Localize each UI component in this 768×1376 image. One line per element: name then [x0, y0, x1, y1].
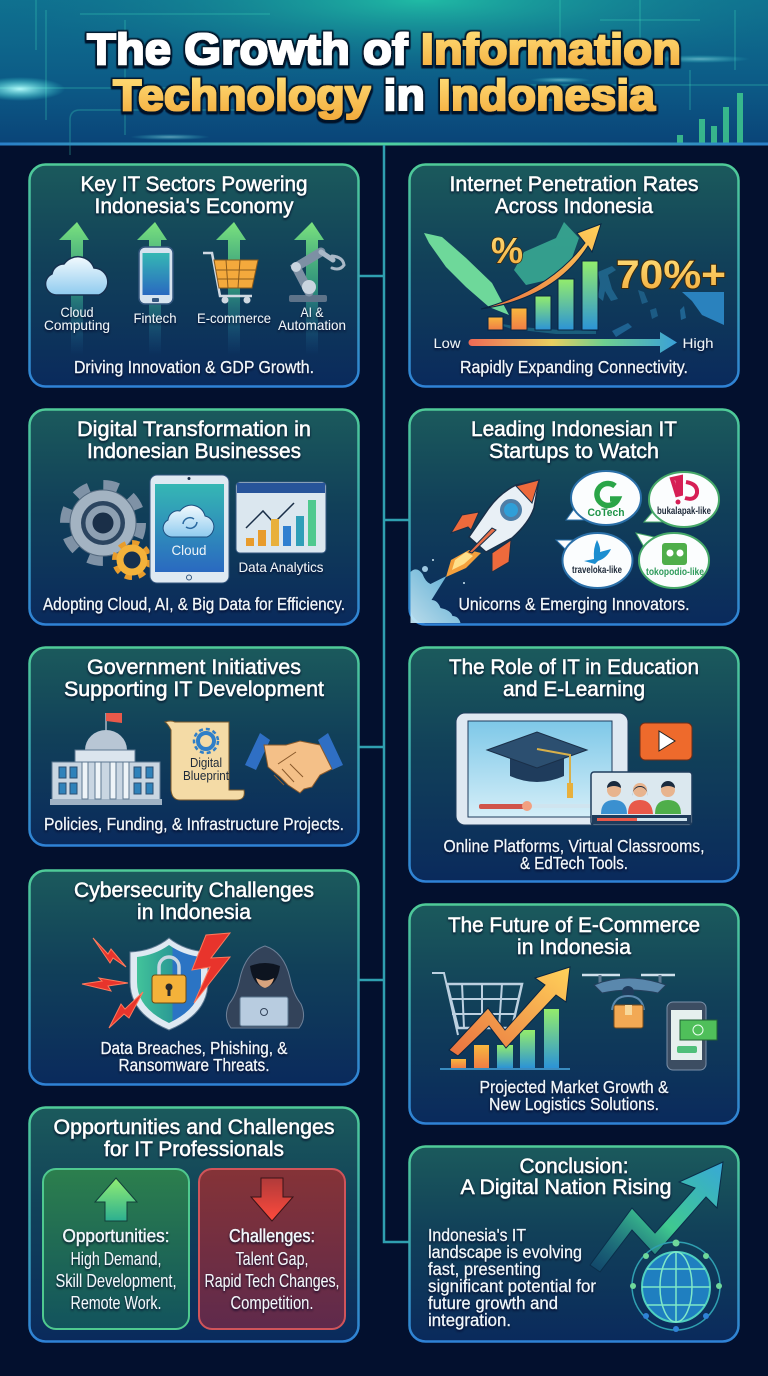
icon: lightning bolts: [82, 933, 230, 1028]
heading: [77, 418, 311, 463]
conclusion body text: significant potential for: [428, 1276, 596, 1296]
bubble: tokopodio: [636, 533, 709, 588]
sector labels: Automation: [278, 317, 346, 333]
heading: [74, 879, 314, 924]
caption: Rapidly Expanding Connectivity.: [460, 357, 688, 377]
bar chart: [488, 261, 598, 330]
sub-panel: challenges: [199, 1169, 345, 1329]
conclusion body text: fast, presenting: [428, 1259, 541, 1279]
icon: digital blueprint scroll: [165, 721, 244, 800]
opportunities text: [56, 1226, 176, 1313]
caption: [100, 1038, 288, 1075]
stat: 70%+: 70%+: [616, 253, 726, 297]
icon: digital blueprint scroll: Blueprint: [183, 768, 229, 783]
icon: up arrow: [95, 1178, 137, 1221]
heading: [471, 418, 677, 463]
icon: rocket: [446, 480, 539, 577]
heading: and E-Learning: [503, 678, 645, 701]
header banner: [0, 0, 768, 155]
panel: future of e-commerce: [410, 904, 738, 1124]
heading: internet penetration: [450, 173, 698, 218]
conclusion body text: future growth and: [428, 1293, 558, 1313]
caption: [480, 1077, 669, 1114]
heading: internet penetration: Across Indonesia: [495, 195, 653, 218]
conclusion body text: landscape is evolving: [428, 1242, 582, 1262]
bar chart: [440, 1009, 570, 1070]
icon: play button: [640, 723, 692, 760]
icon: tablet cloud: Cloud: [172, 542, 206, 558]
low to high scale: [434, 332, 714, 353]
timeline connector: [359, 145, 409, 1242]
challenges text: Challenges:: [229, 1226, 315, 1246]
icon: down arrow: [251, 1178, 293, 1221]
title: Technology in Indonesia: [113, 71, 656, 120]
label: data analytics: Data Analytics: [238, 559, 324, 575]
heading: key IT sectors: Key IT Sectors Powering: [80, 173, 308, 196]
title: [87, 25, 681, 120]
opportunities text: Skill Development,: [56, 1271, 176, 1291]
bubble: bukalapak: [644, 472, 719, 527]
opportunities text: Remote Work.: [70, 1293, 162, 1313]
icon: mobile payment: [667, 1002, 717, 1070]
caption: Ransomware Threats.: [118, 1055, 270, 1075]
icon: phone: [139, 247, 173, 304]
bubble: traveloka: traveloka-like: [572, 565, 622, 576]
sector labels: Computing: [44, 317, 110, 333]
challenges text: Rapid Tech Changes,: [204, 1271, 340, 1291]
bubble: bukalapak: bukalapak-like: [657, 506, 711, 517]
icon: delivery drone: [582, 975, 675, 1028]
rising arrow: [481, 224, 601, 309]
map of Indonesia: [424, 222, 724, 337]
heading: key IT sectors: Indonesia's Economy: [94, 195, 294, 218]
icon: robot arm: [289, 252, 344, 302]
panel: cybersecurity: [30, 870, 358, 1084]
icon: shopping cart: [432, 973, 522, 1035]
icon: shield with lock: [130, 938, 208, 1030]
heading: Startups to Watch: [489, 440, 659, 463]
sector labels: AI &: [300, 304, 324, 320]
sector labels: [44, 304, 346, 333]
icon: analytics window: [236, 482, 326, 553]
heading: in Indonesia: [137, 901, 251, 924]
heading: Supporting IT Development: [64, 678, 324, 701]
panel: government initiatives: [30, 648, 358, 846]
low to high scale: Low: [434, 335, 461, 351]
heading: Conclusion:: [520, 1155, 628, 1178]
challenges text: Competition.: [230, 1293, 314, 1313]
sub-panel: opportunities: [43, 1169, 189, 1329]
conclusion body text: [428, 1225, 596, 1330]
caption: Projected Market Growth &: [480, 1077, 669, 1097]
low to high scale: High: [682, 335, 714, 351]
heading: The Role of IT in Education: [449, 656, 699, 679]
bubble: traveloka: [556, 533, 632, 588]
heading: in Indonesia: [517, 936, 631, 959]
caption: Unicorns & Emerging Innovators.: [458, 594, 690, 614]
icon: gears: [65, 485, 149, 577]
panel: education: [410, 648, 738, 882]
header divider line: [0, 142, 768, 146]
opportunities text: High Demand,: [70, 1249, 162, 1269]
icon: rocket smoke: [410, 559, 465, 623]
sector labels: E-commerce: [197, 310, 271, 326]
caption: New Logistics Solutions.: [489, 1094, 659, 1114]
bubble: tokopodio: tokopodio-like: [646, 567, 704, 578]
icon: hacker: [226, 946, 304, 1028]
bubble: CoTech: CoTech: [588, 507, 625, 519]
caption: Adopting Cloud, AI, & Big Data for Efficiency.: [43, 594, 345, 614]
heading: Opportunities and Challenges: [54, 1116, 334, 1139]
sector labels: Cloud: [60, 304, 94, 320]
percent symbol: %: [491, 230, 523, 271]
conclusion body text: integration.: [428, 1310, 511, 1330]
challenges text: Talent Gap,: [236, 1249, 308, 1269]
icon: virtual classroom: [591, 772, 692, 825]
heading: [54, 1116, 334, 1161]
heading: Cybersecurity Challenges: [74, 879, 314, 902]
icon: handshake: [245, 733, 343, 793]
conclusion body text: Indonesia's IT: [428, 1225, 526, 1245]
icon: globe: [630, 1240, 722, 1332]
caption: Policies, Funding, & Infrastructure Projects.: [44, 814, 344, 834]
growth arrow: [449, 967, 570, 1056]
heading: for IT Professionals: [104, 1138, 284, 1161]
caption: Data Breaches, Phishing, &: [100, 1038, 288, 1058]
bubble: CoTech: [566, 471, 641, 525]
caption: & EdTech Tools.: [520, 853, 628, 873]
icon: tablet cloud: [150, 475, 229, 583]
caption: [444, 836, 704, 873]
icon: tablet with mortarboard: [456, 713, 628, 825]
heading: key IT sectors: [80, 173, 308, 218]
heading: [449, 656, 699, 701]
panel: digital transformation: [30, 410, 358, 624]
panel: opportunities and challenges: [30, 1108, 358, 1342]
title: The Growth of Information: [87, 25, 681, 74]
heading: A Digital Nation Rising: [460, 1176, 672, 1199]
heading: [460, 1155, 672, 1199]
icon: digital blueprint scroll: Digital: [190, 755, 222, 770]
panel: conclusion: [410, 1146, 738, 1342]
heading: Leading Indonesian IT: [471, 418, 677, 441]
icon: government building: [50, 713, 162, 805]
icon: shopping cart: [203, 253, 258, 304]
challenges text: [204, 1226, 340, 1313]
panel: startups: [410, 410, 738, 624]
growth arrows: [59, 222, 324, 355]
heading: [64, 656, 324, 701]
caption: Online Platforms, Virtual Classrooms,: [444, 836, 704, 856]
caption: Driving Innovation & GDP Growth.: [74, 357, 314, 377]
panel: internet penetration: [410, 164, 738, 386]
panel: key IT sectors: [30, 164, 358, 386]
heading: The Future of E-Commerce: [448, 914, 700, 937]
heading: internet penetration: Internet Penetration Rates: [450, 173, 698, 196]
heading: Indonesian Businesses: [87, 440, 301, 463]
heading: Government Initiatives: [87, 656, 301, 679]
rising arrow: [590, 1162, 723, 1272]
sector labels: Fintech: [134, 310, 176, 326]
opportunities text: Opportunities:: [62, 1226, 170, 1246]
heading: [448, 914, 700, 959]
icon: cloud: [46, 257, 108, 295]
heading: Digital Transformation in: [77, 418, 311, 441]
